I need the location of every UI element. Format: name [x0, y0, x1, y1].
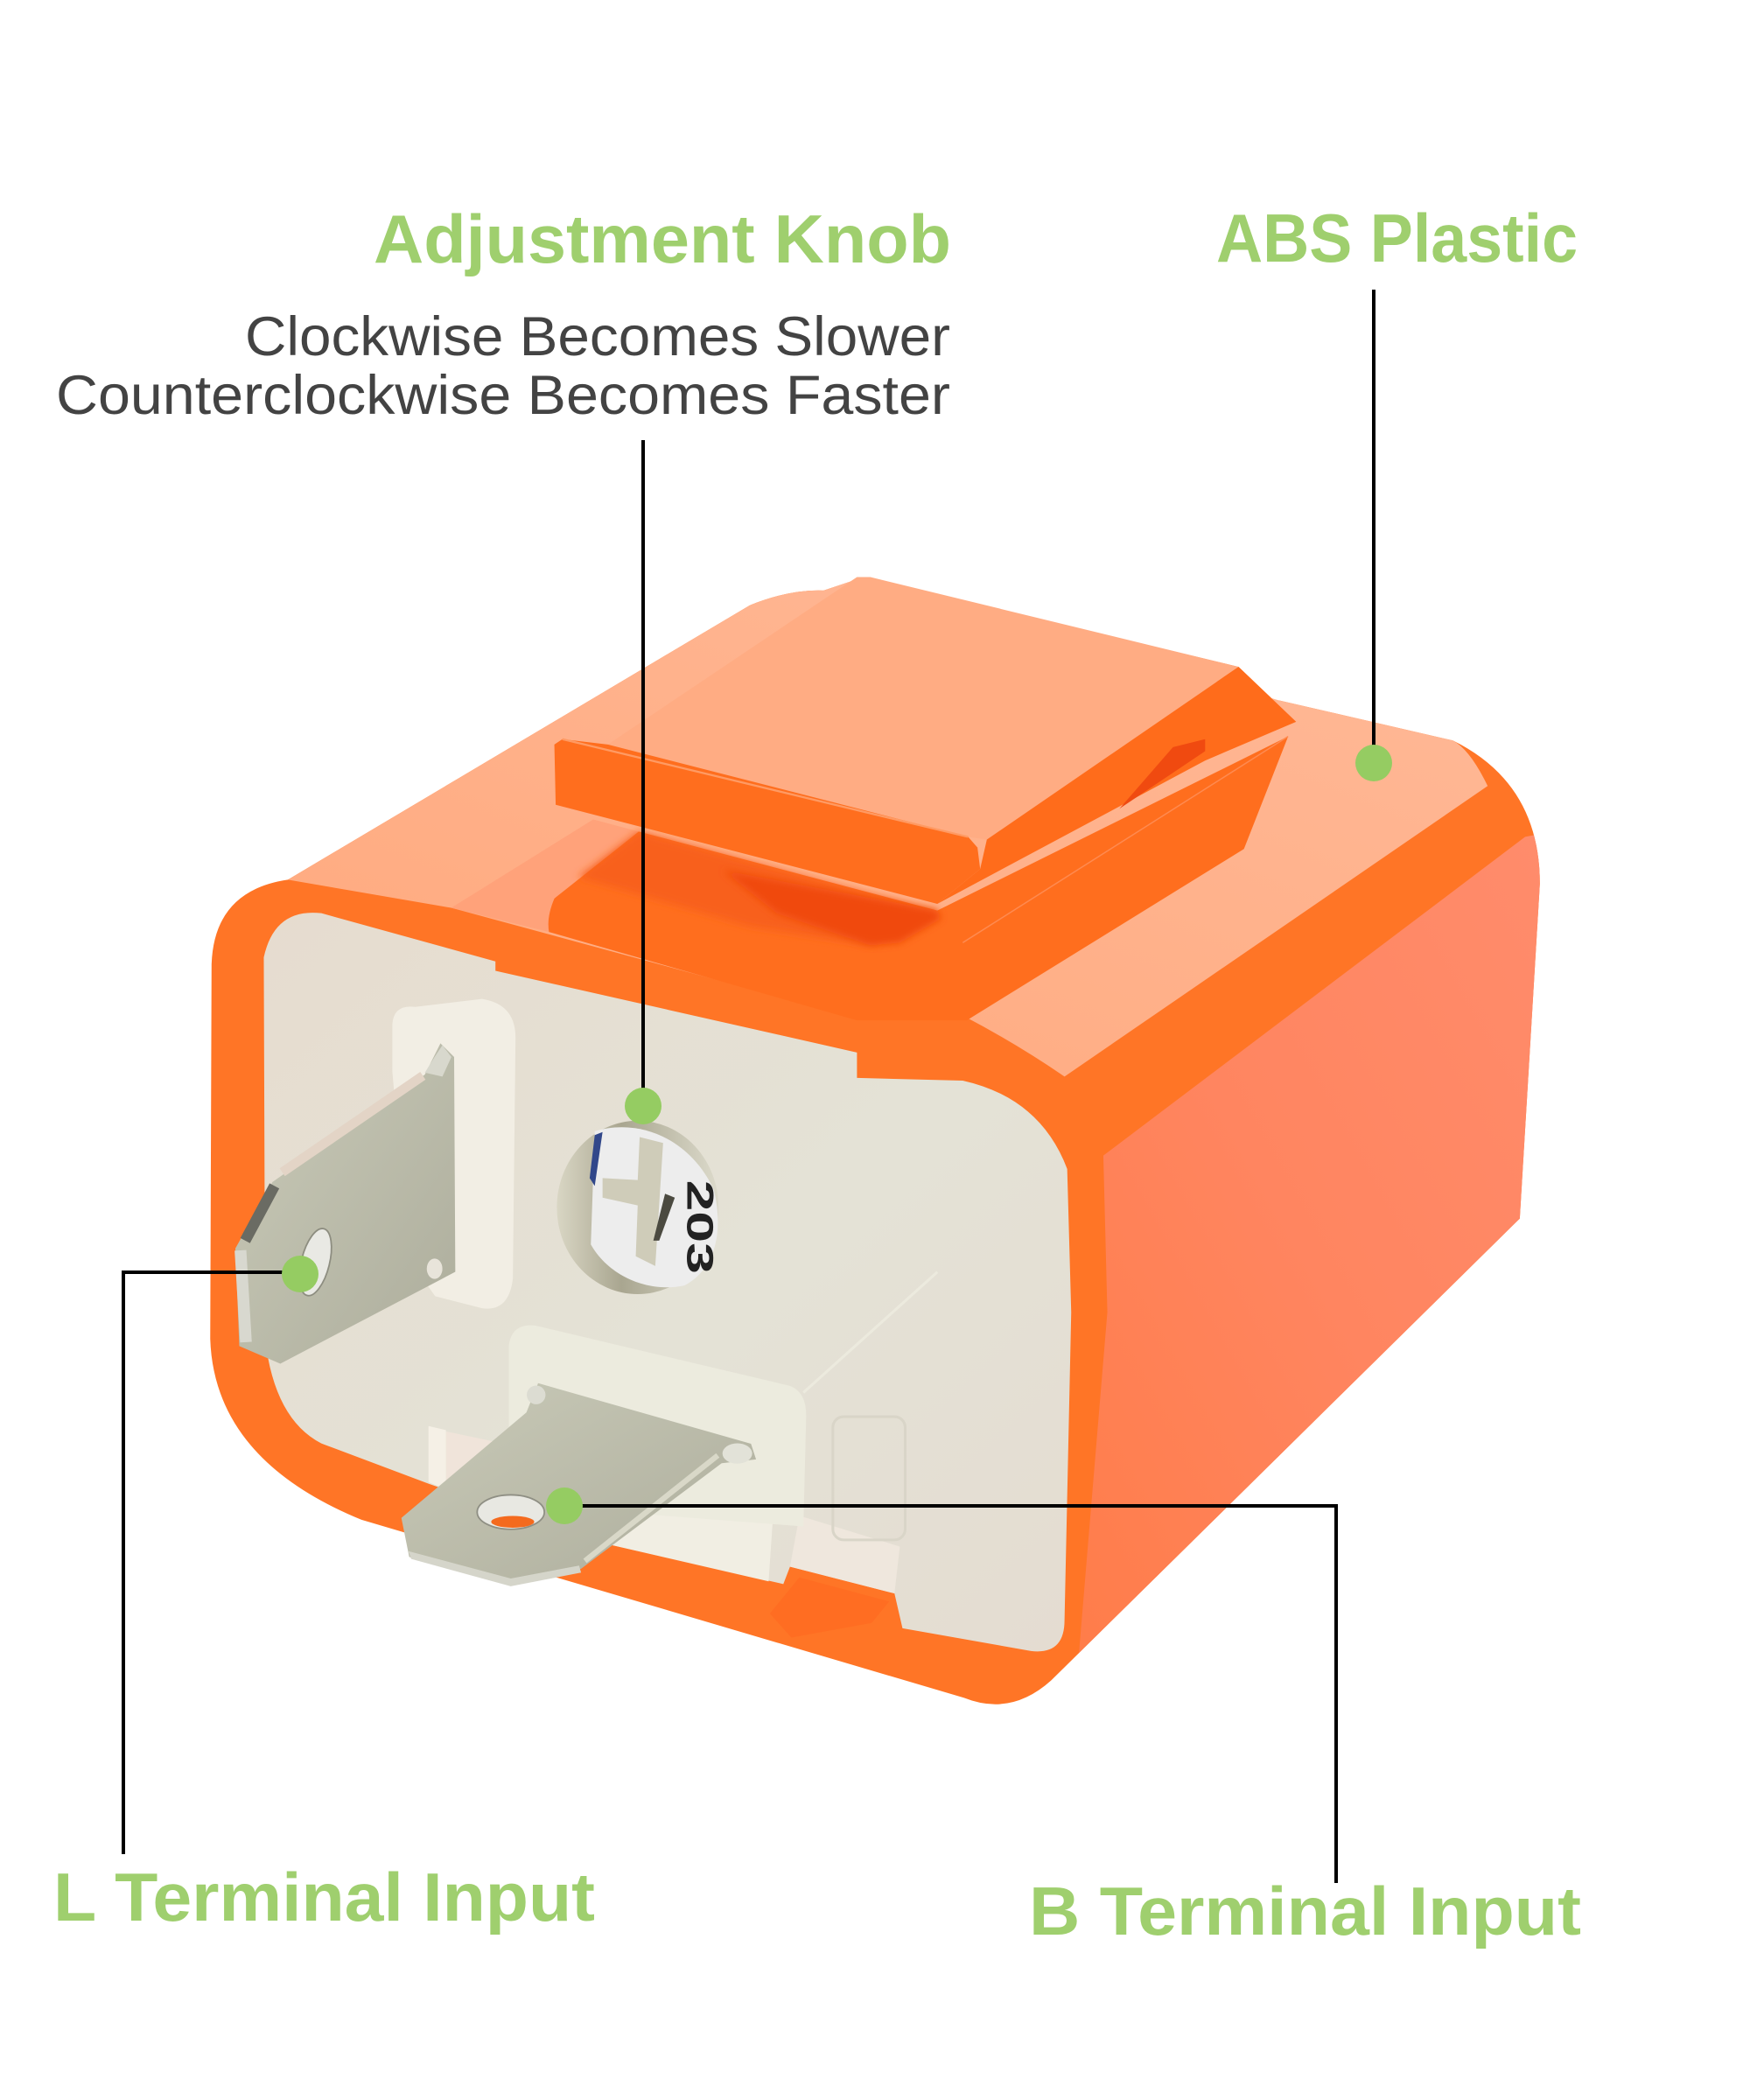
- description: knob direction: [56, 306, 950, 426]
- orange latch at base: [770, 1578, 889, 1638]
- right lower step: [790, 1516, 900, 1593]
- marker dot: L terminal: [282, 1256, 318, 1292]
- cast shadow deep part: [723, 871, 942, 945]
- leader line: ABS plastic: [1372, 290, 1376, 763]
- marker dot: ABS plastic: [1355, 745, 1392, 781]
- L terminal socket: [392, 999, 515, 1309]
- cast shadow left part: [578, 831, 937, 945]
- clip right edge: [937, 667, 1296, 904]
- left lower step edge: [429, 1426, 446, 1489]
- B socket stem: [589, 1510, 773, 1581]
- heading: B Terminal Input: B Terminal Input: [1029, 1872, 1581, 1950]
- clip front highlight: [563, 739, 968, 836]
- faint mold line: [803, 1272, 937, 1393]
- embossed mark: [833, 1417, 905, 1540]
- top face: [288, 578, 1488, 1076]
- leader line: B terminal: [564, 1506, 1336, 1883]
- description: knob direction: Clockwise Becomes Slower: [245, 306, 950, 368]
- terminals and adjustment knob: [235, 1043, 756, 1586]
- channel under clip: [549, 737, 1288, 1020]
- heading: L Terminal Input: L Terminal Input: [53, 1858, 595, 1936]
- leader line: adjustment knob: [641, 440, 645, 1106]
- knob marking: 203: [679, 1180, 721, 1274]
- translucent step left of clip: [452, 820, 639, 932]
- clip top surface: [608, 578, 1239, 839]
- clip front edge: [555, 739, 980, 904]
- clip slot: [1119, 739, 1205, 808]
- marker dot: B terminal: [546, 1488, 583, 1524]
- B terminal socket: [509, 1326, 806, 1527]
- L terminal blade: [235, 1043, 455, 1363]
- slot line: [962, 737, 1288, 942]
- description: knob direction: Counterclockwise Becomes Faster: [56, 365, 950, 426]
- marker dot: adjustment knob: [625, 1088, 662, 1124]
- product: flasher relay: [210, 578, 1560, 1704]
- heading: ABS Plastic: ABS Plastic: [1216, 200, 1578, 276]
- adjustment knob: [556, 1121, 721, 1294]
- heading: Adjustment Knob: Adjustment Knob: [374, 200, 951, 277]
- right side face: [1078, 835, 1540, 1654]
- infographic canvas: [58, 212, 1580, 1949]
- left lower step: [446, 1432, 515, 1495]
- B terminal blade: [402, 1383, 756, 1586]
- leader line: L terminal: [123, 1272, 299, 1854]
- front cover: cream insert: [263, 913, 1071, 1651]
- housing silhouette: [210, 578, 1540, 1704]
